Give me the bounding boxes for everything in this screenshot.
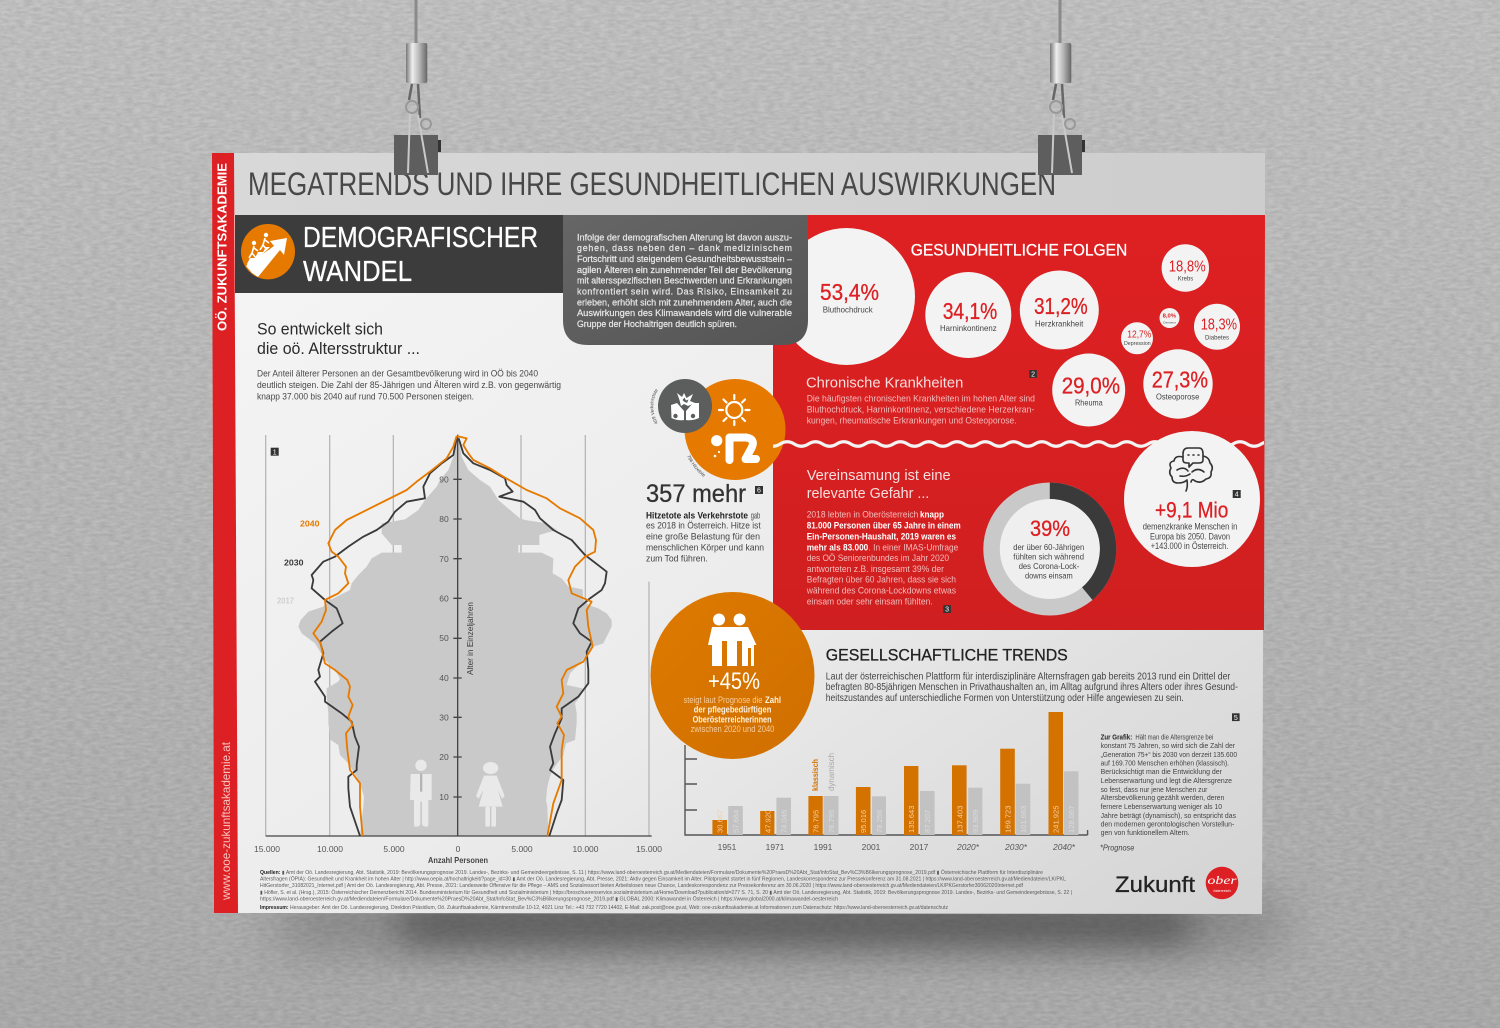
chart note text: so fest, dass nur jene Menschen zur bbox=[1101, 785, 1208, 794]
heat text: eine große Belastung für den bbox=[646, 532, 760, 543]
sources footer bbox=[260, 869, 1072, 911]
pyramid age labels: 40 bbox=[439, 673, 449, 683]
sidebar bbox=[212, 153, 238, 913]
chart note text: Zur Grafik: bbox=[1101, 732, 1132, 742]
logo: Zukunft Oberösterreich bbox=[1115, 867, 1238, 899]
bar chart bbox=[685, 712, 1088, 852]
circle: Osteoporose bbox=[1143, 349, 1213, 419]
left intro text: Der Anteil älterer Personen an der Gesamtbevölkerung wird in OÖ bis 2040 bbox=[257, 368, 538, 380]
2040 population line bbox=[313, 436, 457, 836]
chart note text: Hält man die Altersgrenze bei bbox=[1135, 732, 1214, 742]
intro text: agilen Älteren ein zunehmender Teil der Bevölkerung bbox=[577, 265, 792, 275]
small curved labels bbox=[650, 389, 705, 476]
badge 6 bbox=[755, 486, 763, 495]
sources footer: https://www.land-oberoesterreich.gv.at/Mediendateien/Formulare/Dokumente%20PraesD%20Abt_Stat/InfoStat_Bev%C3%B6lkerungsprognose_2019.pdf ▮ GLOBAL 2000: Klimawandel in Österreich | https://www.global2000.at/klimawandel-oesterreich bbox=[260, 896, 838, 902]
bar values: 47.920 bbox=[764, 810, 772, 833]
pyramid x labels: 0 bbox=[456, 844, 461, 854]
orange care circle: zwischen 2020 und 2040 bbox=[691, 724, 774, 734]
bar values: 241.925 bbox=[1052, 806, 1060, 833]
orange care circle: +45% bbox=[708, 668, 760, 695]
red health panel bbox=[773, 215, 1265, 630]
population pyramid chart bbox=[254, 435, 662, 865]
bar chart: 76.795 bbox=[827, 810, 836, 833]
trends text: befragten 80-85jährigen Menschen in Privathaushalten an, im Alltag aufgrund ihres Alters oder ihres Gesund- bbox=[826, 682, 1238, 693]
chronic diseases text: Die häufigsten chronischen Krankheiten im hohen Alter sind bbox=[807, 394, 1035, 405]
circle: Depression bbox=[1121, 322, 1153, 354]
icon: crashing cars bbox=[671, 393, 699, 420]
chart note text: „Generation 75+“ bis 2030 von derzeit 135.600 bbox=[1101, 750, 1237, 759]
intro text: Gruppe der Hochaltrigen deutlich spüren. bbox=[577, 319, 737, 329]
badge 3 bbox=[943, 605, 951, 614]
trends text: heitszustandes auf unterschiedliche Formen von Unterstützung oder Hilfe angewiesen zu sein. bbox=[826, 693, 1184, 704]
intro text: erleben, erhöht sich mit zunehmendem Alter, auch die bbox=[577, 298, 792, 308]
chart note text: Jahre beträgt (dynamisch), so entspricht das bbox=[1101, 811, 1236, 820]
chronic diseases text: Chronische Krankheiten bbox=[806, 375, 963, 392]
pyramid year labels: 2030 bbox=[284, 558, 304, 568]
bar year labels: 2017 bbox=[910, 842, 929, 852]
bar year labels: 1991 bbox=[814, 842, 833, 852]
donut chart: 39%: fühlten sich während bbox=[1013, 552, 1084, 562]
bar chart axes bbox=[685, 745, 1088, 835]
pyramid age labels: 90 bbox=[439, 474, 449, 484]
donut chart: 39% bbox=[983, 482, 1116, 616]
population pyramid chart: Alter in Einzeljahren bbox=[465, 602, 475, 675]
circle: Bluthochdruck: Bluthochdruck bbox=[823, 304, 873, 314]
loneliness text: mehr als 83.000 bbox=[807, 542, 868, 553]
pyramid age labels: 80 bbox=[439, 514, 449, 524]
badge 2 bbox=[1029, 370, 1037, 378]
chronic diseases text bbox=[806, 370, 1037, 427]
chronic diseases text: kungen, rheumatische Erkrankungen und Osteoporose. bbox=[807, 416, 1017, 427]
chart note text: Altersbevölkerung gezählt werden, deren bbox=[1101, 793, 1224, 802]
pyramid axes bbox=[266, 435, 652, 836]
pyramid x labels: 10.000 bbox=[317, 844, 343, 854]
chart note text: fernere Lebenserwartung weniger als 10 bbox=[1101, 802, 1222, 811]
circle: Krebs bbox=[1162, 244, 1209, 292]
orange care circle: Oberösterreicherinnen bbox=[693, 714, 772, 724]
loneliness text: 2018 lebten in Oberösterreich bbox=[807, 510, 918, 521]
bar chart: 78.256 bbox=[875, 810, 884, 833]
icon: stairs arrow bbox=[241, 224, 295, 279]
sources footer: Impressum: Herausgeber: Amt der Oö. Landesregierung, Direktion Präsidium, Oö. Zukunftsakademie, Kärntnerstraße 10-12, 4021 Linz Tel.: +43 732 7720 14402, E-Mail: zak.post@ooe.gv.at, Web: ooe-zukunftsakademie.at Informationen zum Datenschutz: https://www.land-oberoesterreich.gv.at/datenschutz bbox=[260, 905, 948, 911]
badge 5 bbox=[1232, 713, 1240, 722]
loneliness text: 81.000 Personen über 65 Jahre in einem bbox=[807, 520, 961, 531]
bar values: 169.723 bbox=[1004, 806, 1012, 833]
left intro text bbox=[257, 368, 561, 402]
icon: brain with speech bubble bbox=[1170, 448, 1212, 491]
heading: gesellschaftliche trends: GESELLSCHAFTLICHE TRENDS bbox=[826, 646, 1068, 665]
orange care circle bbox=[650, 592, 814, 759]
donut chart: 39%: downs einsam bbox=[1025, 571, 1073, 581]
circle: Demenz: Demenz bbox=[1163, 320, 1176, 324]
poster sheet bbox=[212, 153, 1265, 914]
circle: Diabetes bbox=[1194, 304, 1240, 350]
bar values bbox=[716, 806, 1060, 833]
badge 3: 3 bbox=[945, 607, 949, 614]
pyramid year labels bbox=[277, 518, 320, 606]
bar values: 137.403 bbox=[956, 806, 964, 833]
chart note text: *Prognose bbox=[1100, 842, 1135, 852]
circle: Harninkontinenz bbox=[925, 272, 1011, 358]
orange care circle: steigt laut Prognose die bbox=[684, 695, 763, 705]
pyramid age labels: 30 bbox=[439, 712, 449, 722]
sources footer: ▮ Höfler, S. et al. (Hrsg.), 2015: Österreichischer Demenzbericht 2014. Bundesministerium für Gesundheit und Sozialministerium | https://broschuerenservice.sozialministerium.at/Home/Download?publicationId=277 S. 71, S. 20 ▮ Amt der Oö. Landesregierung, Abt. Statistik, 2019: Bevölkerungsprognose 2019. Landes-, Bezirks- und Gemeindeergebnisse, S. 22 | bbox=[260, 889, 1072, 896]
bar chart: 87.207 bbox=[923, 810, 932, 833]
dementia circle: demenzkranke Menschen in bbox=[1143, 522, 1237, 532]
hanging clip right bbox=[1038, 0, 1085, 175]
badge 1: 1 bbox=[273, 449, 277, 456]
pyramid age labels: 70 bbox=[439, 554, 449, 564]
icon: two elderly people bbox=[708, 614, 756, 666]
orange classic bars bbox=[712, 712, 1063, 835]
bar year labels: 1971 bbox=[766, 842, 785, 852]
loneliness text: Befragten über 60 Jahren, dass sie sich bbox=[807, 575, 956, 586]
pyramid x labels: 10.000 bbox=[572, 844, 599, 854]
chart note text bbox=[1100, 732, 1237, 852]
icon: woman bbox=[476, 762, 505, 827]
intro text: mit altersspezifischen Beschwerden und Erkrankungen bbox=[577, 276, 792, 286]
main title: MEGATRENDS UND IHRE GESUNDHEITLICHEN AUSWIRKUNGEN bbox=[248, 166, 1056, 202]
chart note text: Berücksichtigt man die Entwicklung der bbox=[1101, 767, 1223, 776]
circle: heat deaths bbox=[684, 379, 786, 480]
circle: Herzkrankheit bbox=[1020, 270, 1099, 350]
pyramid x labels: 15.000 bbox=[636, 844, 662, 854]
heading: gesundheitliche folgen: GESUNDHEITLICHE FOLGEN bbox=[911, 241, 1127, 260]
icon: sun bbox=[719, 395, 750, 425]
chart note text: Lebenserwartung und legt die Altersgrenze bbox=[1101, 776, 1232, 785]
circle: Bluthochdruck: 53,4% bbox=[820, 279, 879, 305]
top title band bbox=[234, 153, 1265, 215]
357 mehr figure: 357 mehr bbox=[646, 480, 746, 508]
badge 2: 2 bbox=[1031, 372, 1035, 378]
icon: man bbox=[410, 760, 432, 827]
pyramid x labels: 5.000 bbox=[511, 844, 533, 854]
badge 5: 5 bbox=[1234, 715, 1238, 722]
icon: collapsed person bbox=[711, 435, 756, 460]
trends text: Laut der österreichischen Plattform für interdisziplinäre Alternsfragen gab bereits 2013 rund ein Drittel der bbox=[826, 671, 1231, 682]
bar values: 76.795 bbox=[812, 810, 820, 833]
pyramid axis titles: Anzahl Personen bbox=[428, 855, 488, 865]
chart note text: auf 169.700 Menschen erhöhen (klassisch). bbox=[1101, 758, 1229, 768]
circle: Demenz bbox=[1160, 308, 1180, 328]
chart note text: den modernen gerontologischen Vorstellun- bbox=[1101, 820, 1235, 828]
dementia circle: Europa bis 2050. Davon bbox=[1150, 531, 1230, 541]
circle: Harninkontinenz: Harninkontinenz bbox=[940, 323, 997, 333]
wave divider bbox=[766, 442, 1275, 446]
donut chart: 39%: der über 60-Jährigen bbox=[1013, 542, 1084, 552]
dementia circle: +143.000 in Österreich. bbox=[1151, 541, 1228, 551]
circle: Diabetes: Diabetes bbox=[1205, 335, 1229, 341]
left intro text: deutlich steigen. Die Zahl der 85-Jährigen und Älteren wird z.B. von gegenwärtig bbox=[257, 380, 561, 391]
badge 4: 4 bbox=[1235, 492, 1239, 499]
left heading: altersstruktur: So entwickelt sich bbox=[257, 320, 383, 338]
circle: Krebs: Krebs bbox=[1178, 277, 1193, 283]
loneliness text: knapp bbox=[920, 510, 944, 521]
intro text: konfrontiert sein wird. Das Risiko, Einsamkeit zu bbox=[577, 286, 792, 296]
pyramid age labels: 20 bbox=[439, 752, 449, 762]
loneliness text: Vereinsamung ist eine bbox=[807, 467, 951, 484]
loneliness text bbox=[806, 467, 961, 614]
circle: traffic deaths bbox=[658, 379, 712, 433]
left heading: altersstruktur: die oö. Altersstruktur ... bbox=[257, 340, 420, 358]
heading band: demografischer wandel: WANDEL bbox=[303, 256, 412, 288]
sidebar: www.ooe-zukunftsakademie.at bbox=[219, 741, 233, 901]
small curved labels: 409 Verkehrstote bbox=[650, 389, 658, 424]
pyramid age labels: 10 bbox=[439, 792, 449, 802]
pyramid x labels bbox=[254, 844, 662, 854]
loneliness text: relevante Gefahr ... bbox=[807, 485, 929, 502]
bar year labels: 2040* bbox=[1052, 842, 1076, 852]
bar values: 135.643 bbox=[907, 806, 916, 833]
circle: Diabetes: 18,3% bbox=[1201, 317, 1237, 334]
bar year labels: 1951 bbox=[718, 842, 737, 852]
donut chart: 39%: 39% bbox=[1030, 516, 1070, 541]
left heading: altersstruktur bbox=[257, 320, 420, 358]
pyramid year labels: 2040 bbox=[300, 518, 320, 528]
pyramid age labels bbox=[439, 474, 449, 802]
circle: Krebs: 18,8% bbox=[1169, 259, 1206, 276]
pyramid x labels: 15.000 bbox=[254, 844, 280, 854]
circle: Demenz: 8,0% bbox=[1163, 314, 1176, 320]
bar chart: 101.663 bbox=[1019, 806, 1028, 833]
pyramid age labels: 50 bbox=[439, 633, 449, 643]
pyramid x labels: 5.000 bbox=[383, 844, 405, 854]
heading text: DEMOGRAFISCHER bbox=[303, 222, 538, 254]
bar year labels: 2030* bbox=[1004, 842, 1028, 852]
loneliness text: . In einer IMAS-Umfrage bbox=[868, 542, 958, 553]
intro text: Infolge der demografischen Alterung ist davon auszu- bbox=[577, 232, 792, 242]
chart note text: konstant 75 Jahren, so wird sich die Zahl der bbox=[1101, 741, 1235, 750]
2017 age silhouette bbox=[298, 435, 612, 836]
circle: Herzkrankheit: Herzkrankheit bbox=[1035, 319, 1084, 329]
heat text: menschlichen Körper und kann bbox=[646, 543, 764, 554]
left intro text: knapp 37.000 bis 2040 auf rund 70.500 Personen steigen. bbox=[257, 392, 474, 402]
circle: Depression: 12,7% bbox=[1127, 330, 1151, 341]
trends text bbox=[826, 671, 1238, 704]
heading band: demografischer wandel bbox=[235, 215, 565, 293]
pyramid age labels: 60 bbox=[439, 594, 449, 604]
bar chart: 93.909 bbox=[971, 810, 980, 833]
circle: Rheuma: Rheuma bbox=[1075, 398, 1103, 408]
bar values: 30.667 bbox=[716, 810, 724, 833]
2030 population line bbox=[312, 438, 457, 836]
bar year labels bbox=[718, 842, 1076, 852]
loneliness text: des OÖ Seniorenbundes im Jahr 2020 bbox=[807, 553, 949, 564]
poster shadow bbox=[280, 900, 1280, 945]
gray dynamic bars bbox=[728, 771, 1078, 835]
circle: Osteoporose: 27,3% bbox=[1152, 366, 1208, 392]
heat text: gab bbox=[751, 510, 760, 521]
heat text bbox=[646, 510, 764, 565]
heat text: zum Tod führen. bbox=[646, 554, 708, 565]
circle: Rheuma: 29,0% bbox=[1062, 373, 1120, 399]
sources footer: Altersfragen (ÖPIA): Gesundheit und Krankheit im hohen Alter | http://www.oepia.at/hochaltrigkeit/?page_id=30 ▮ Amt der Oö. Landesregierung, Abt. Presse, 2021: Aktiv gegen Einsamkeit im Alter. Pilotprojekt startet in fünf Regionen, Landeskorrespondenz zur Pressekonferenz am 31.08.2021 | https://www.land-oberoesterreich.gv.at/Mediendateien/LK/PKL bbox=[260, 876, 1066, 882]
dementia circle: +9,1 Mio bbox=[1155, 497, 1228, 522]
bar chart: 128.067 bbox=[1067, 806, 1076, 833]
heat vs traffic deaths bbox=[646, 379, 786, 565]
series labels: klassisch bbox=[810, 759, 820, 791]
intro text: gehen, dass neben den – dank medizinischem bbox=[577, 243, 792, 253]
bar year labels: 2001 bbox=[862, 842, 881, 852]
logo: Zukunft Oberösterreich: ober bbox=[1208, 873, 1237, 887]
bar values: 95.016 bbox=[859, 810, 868, 833]
hanging clip left bbox=[394, 0, 441, 175]
orange care circle: Zahl bbox=[765, 695, 781, 705]
bar chart: 57.684 bbox=[732, 810, 740, 833]
dementia circle bbox=[1124, 431, 1260, 567]
circle: Herzkrankheit: 31,2% bbox=[1034, 293, 1088, 319]
sources footer: Quellen: ▮ Amt der Oö. Landesregierung, Abt. Statistik, 2019: Bevölkerungsprognose 2019. Landes-, Bezirks- und Gemeindeergebnisse, S. 11 | https://www.land-oberoesterreich.gv.at/Mediendateien/Formulare/Dokumente%20PraesD%20Abt_Stat/InfoStat_Bev%C3%B6lkerungsprognose_2019.pdf ▮ Österreichische Plattform für Interdisziplinäre bbox=[260, 869, 1043, 876]
donut chart: 39%: des Corona-Lock- bbox=[1019, 561, 1079, 571]
circle: Osteoporose: Osteoporose bbox=[1156, 392, 1200, 402]
loneliness text: während des Corona-Lockdowns etwas bbox=[806, 586, 956, 597]
bar chart: dynamisch bbox=[826, 753, 836, 791]
pyramid grid lines bbox=[266, 435, 649, 836]
small curved labels: 766 Hitzetote bbox=[687, 454, 705, 476]
badge 1 bbox=[271, 448, 279, 456]
circle: Depression: Depression bbox=[1124, 341, 1151, 347]
logo: Zukunft Oberösterreich: österreich bbox=[1213, 888, 1231, 893]
intro text: Fortschritt und steigendem Gesundheitsbewusstsein – bbox=[577, 254, 792, 264]
loneliness text: einsam oder sehr einsam fühlten. bbox=[807, 597, 933, 608]
intro text: Auswirkungen des Klimawandels wird die vulnerable bbox=[577, 308, 792, 318]
chart note text: gen von funktionellem Altern. bbox=[1101, 828, 1190, 837]
bar chart: 74.046 bbox=[780, 810, 788, 833]
heat text: Hitzetote als Verkehrstote bbox=[646, 510, 748, 521]
intro text panel bbox=[563, 215, 808, 345]
badge 6: 6 bbox=[757, 488, 761, 495]
loneliness text: antworteten z.B. insgesamt 39% der bbox=[807, 564, 945, 575]
intro text bbox=[577, 232, 792, 329]
heat text: es 2018 in Österreich. Hitze ist bbox=[646, 521, 761, 532]
sources footer: HitGerstorfer_31082021_Internet.pdf | Amt der Oö. Landesregierung, Abt. Presse, 2021: Landesweite Offensive für die Pflege – AMS und Sozialressort bieten Arbeitslosen neue Chance, Landeskorrespondenz zur Pressekonferenz am 30.06.2020 | https://www.land-oberoesterreich.gv.at/Mediendateien/LK/PKGerstorfer30062020Internet.pdf bbox=[260, 883, 1024, 889]
bar year labels: 2020* bbox=[956, 842, 980, 852]
logo: Zukunft Oberösterreich: Zukunft bbox=[1115, 872, 1195, 897]
pyramid year labels: 2017 bbox=[277, 596, 294, 606]
circle: Harninkontinenz: 34,1% bbox=[943, 298, 997, 324]
loneliness text: Ein-Personen-Haushalt, 2019 waren es bbox=[807, 531, 956, 542]
circle: Bluthochdruck bbox=[778, 228, 915, 365]
orange care circle: der pflegebedürftigen bbox=[694, 705, 771, 715]
chronic diseases text: Bluthochdruck, Harninkontinenz, verschiedene Herzerkran- bbox=[807, 405, 1034, 416]
sidebar brand text: OÖ. ZUKUNFTSAKADEMIE bbox=[215, 163, 230, 331]
circle: Rheuma bbox=[1052, 354, 1125, 426]
